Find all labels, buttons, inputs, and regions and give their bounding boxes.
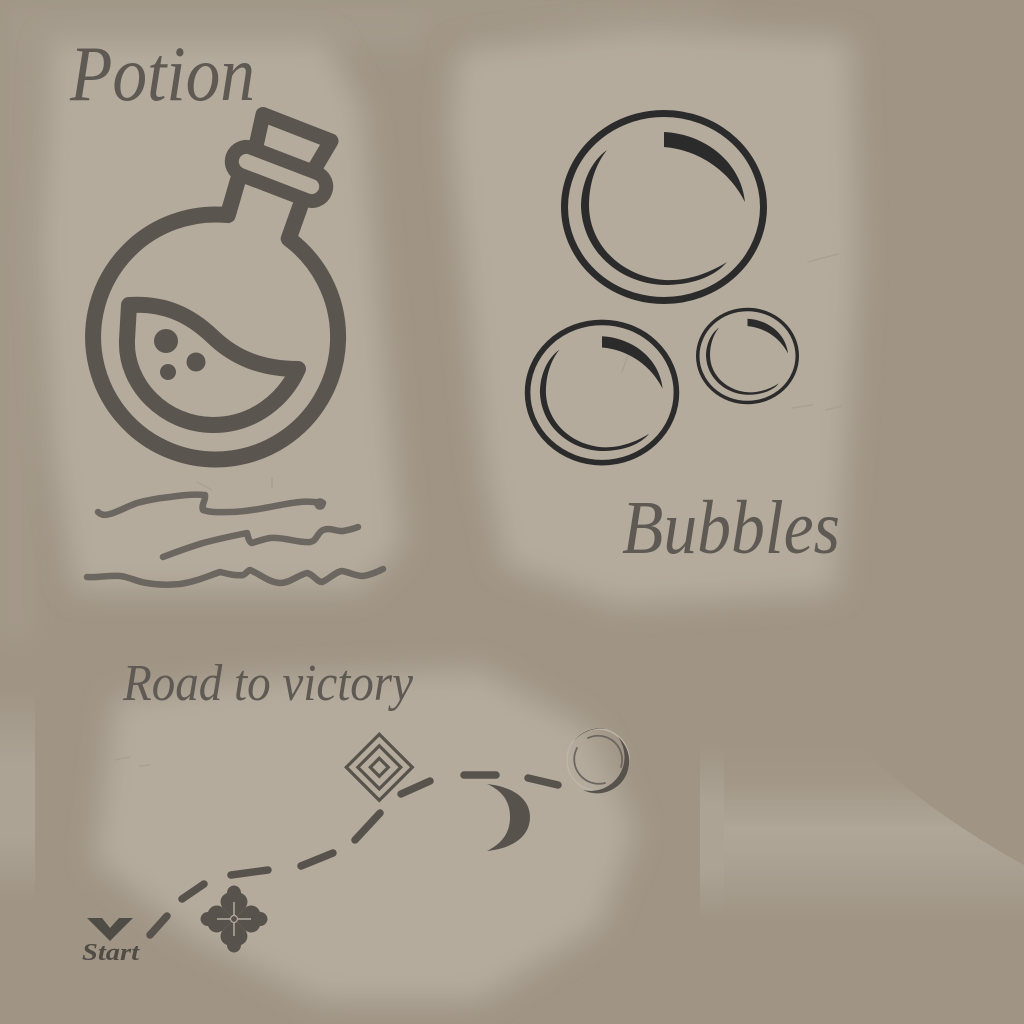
liquid bubbles bbox=[154, 329, 206, 380]
medium bubble bbox=[528, 322, 676, 463]
small bubble bbox=[698, 310, 797, 402]
icon: four-petal flower bbox=[200, 886, 268, 952]
icon: crescent moon bbox=[487, 784, 530, 851]
title: Potion: Potion bbox=[69, 30, 255, 117]
large bubble bbox=[564, 114, 764, 300]
label: Start: Start bbox=[82, 940, 141, 966]
icon: concentric diamond bbox=[346, 734, 412, 800]
potion liquid bbox=[127, 305, 298, 425]
icon: hand-drawn waves bbox=[87, 495, 383, 585]
icon: potion flask bbox=[93, 114, 338, 459]
icon: three bubbles bbox=[528, 114, 797, 463]
paper speckles bbox=[115, 254, 842, 766]
title: Road to victory: Road to victory bbox=[122, 655, 414, 712]
title: Bubbles: Bubbles bbox=[622, 486, 840, 570]
flask body and neck bbox=[93, 180, 338, 459]
flask cork bbox=[256, 114, 331, 168]
icon: rough ring bbox=[567, 728, 629, 793]
icon: start chevron bbox=[87, 918, 133, 941]
dashed road path bbox=[150, 775, 558, 935]
flask collar bbox=[228, 143, 330, 205]
